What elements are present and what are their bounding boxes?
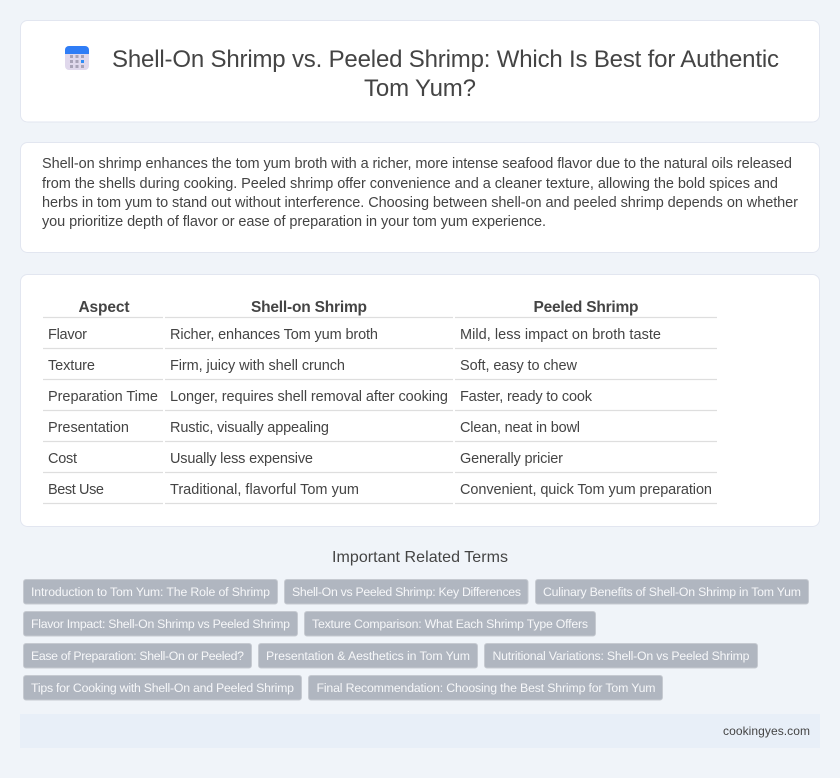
row: cost: Generally pricier (460, 451, 563, 467)
row: best use: Best Use (48, 482, 104, 498)
tag (536, 580, 808, 604)
intro text: from the shells during cooking. Peeled shrimp offer convenience and a cleaner texture, allowing the bold spices and (42, 176, 778, 192)
tag: Texture Comparison: What Each Shrimp Type Offers (312, 617, 588, 631)
row: flavor (48, 327, 661, 343)
tag (24, 676, 302, 700)
tag (258, 644, 478, 668)
row: best use: Traditional, flavorful Tom yum (170, 482, 359, 498)
row: texture: Firm, juicy with shell crunch (170, 358, 345, 374)
table header: Aspect (78, 299, 130, 316)
icon: calendar (65, 46, 89, 70)
tag: Presentation & Aesthetics in Tom Yum (266, 649, 470, 663)
row: flavor: Richer, enhances Tom yum broth (170, 327, 378, 343)
panel: comparison table (20, 274, 820, 526)
panel: title (20, 20, 820, 122)
tag: Introduction to Tom Yum: The Role of Shrimp (31, 585, 270, 599)
row: best use (48, 482, 712, 498)
tag (284, 580, 528, 604)
row: presentation (48, 420, 580, 436)
tag (308, 676, 662, 700)
row: cost: Usually less expensive (170, 451, 313, 467)
tag (24, 644, 252, 668)
row: preparation time (48, 389, 593, 405)
tag (24, 580, 278, 604)
row: preparation time: Preparation Time (48, 389, 158, 405)
tag (484, 644, 758, 668)
tag (304, 612, 596, 636)
tag: Ease of Preparation: Shell-On or Peeled? (31, 649, 244, 663)
row: cost (48, 451, 563, 467)
row: presentation: Rustic, visually appealing (170, 420, 329, 436)
tag (24, 612, 298, 636)
row: flavor: Flavor (48, 327, 87, 343)
row: texture (48, 358, 578, 374)
table header (78, 299, 638, 316)
footer (20, 714, 820, 748)
title text: Shell-On Shrimp vs. Peeled Shrimp: Which Is Best for Authentic (112, 46, 779, 73)
row: best use: Convenient, quick Tom yum preparation (460, 482, 712, 498)
tag: Tips for Cooking with Shell-On and Peeled Shrimp (31, 681, 294, 695)
tag: Culinary Benefits of Shell-On Shrimp in Tom Yum (543, 585, 801, 599)
footer source: cookingyes.com (723, 724, 810, 738)
row: preparation time: Faster, ready to cook (460, 389, 593, 405)
tag: Final Recommendation: Choosing the Best Shrimp for Tom Yum (316, 681, 656, 695)
intro text: herbs in tom yum to stand out without interference. Choosing between shell-on and peeled shrimp depends on whether (42, 195, 798, 211)
table header: Shell-on Shrimp (251, 299, 367, 316)
heading: related terms: Important Related Terms (332, 549, 508, 566)
table header: Peeled Shrimp (534, 299, 638, 316)
row: cost: Cost (48, 451, 77, 467)
row: texture: Soft, easy to chew (460, 358, 578, 374)
intro text: you prioritize depth of flavor or ease of preparation in your tom yum experience. (42, 214, 546, 230)
row: flavor: Mild, less impact on broth taste (460, 327, 661, 343)
related term tags (24, 580, 808, 700)
intro text: Shell-on shrimp enhances the tom yum broth with a richer, more intense seafood flavor due to the natural oils released (42, 156, 792, 172)
row: preparation time: Longer, requires shell removal after cooking (170, 389, 448, 405)
tag: Shell-On vs Peeled Shrimp: Key Differences (292, 585, 521, 599)
panel: introduction (20, 142, 820, 252)
row: presentation: Clean, neat in bowl (460, 420, 580, 436)
row: texture: Texture (48, 358, 95, 374)
tag: Nutritional Variations: Shell-On vs Peeled Shrimp (492, 649, 750, 663)
title text: Tom Yum? (364, 75, 476, 102)
tag: Flavor Impact: Shell-On Shrimp vs Peeled Shrimp (31, 617, 290, 631)
row: presentation: Presentation (48, 420, 129, 436)
